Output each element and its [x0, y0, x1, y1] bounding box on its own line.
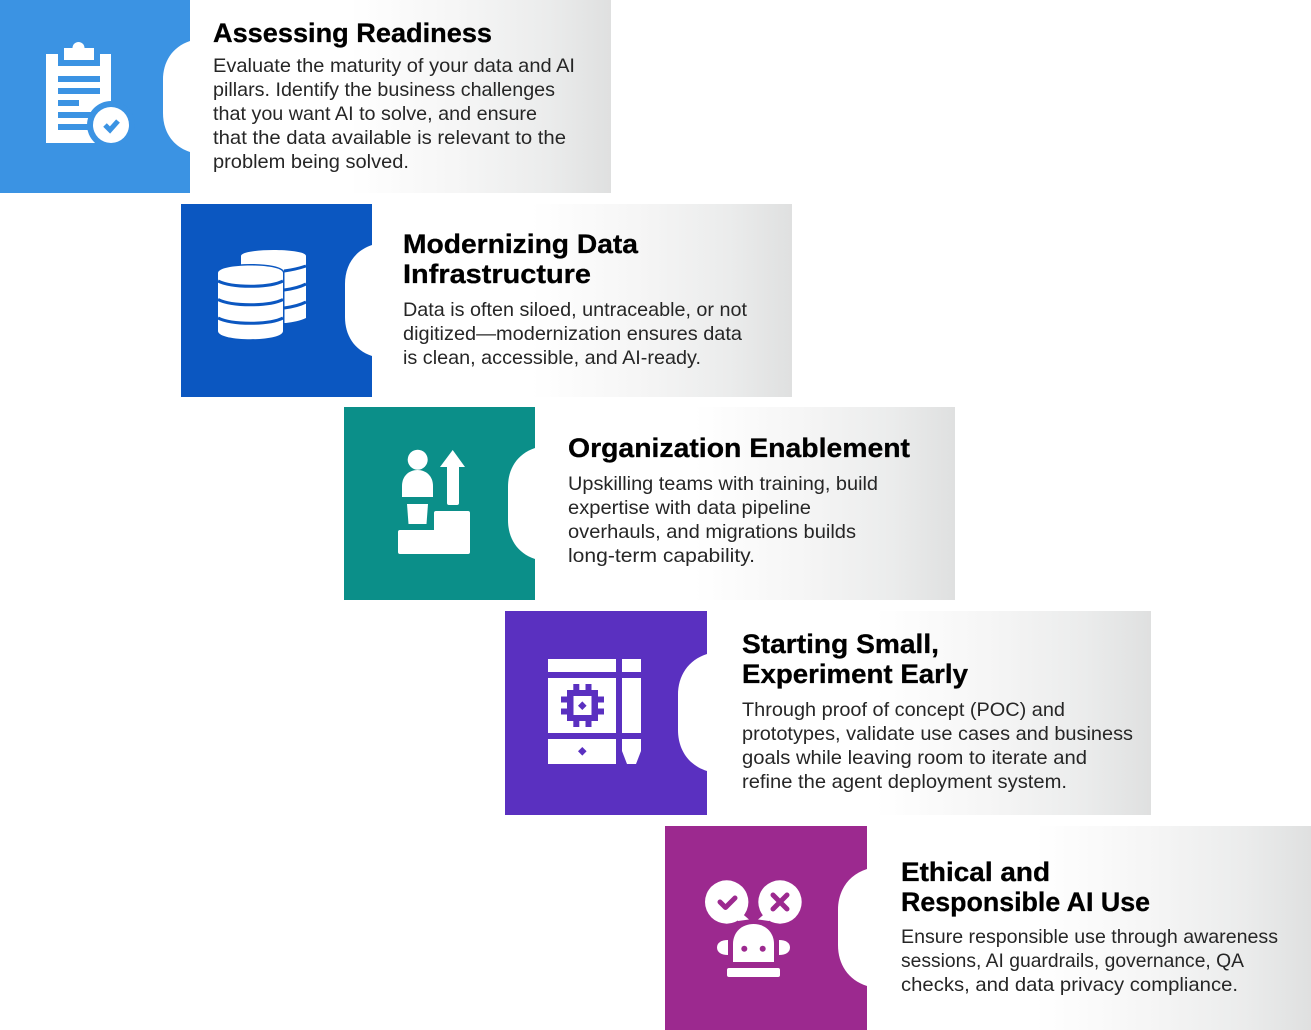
text block: sessions, AI guardrails, governance, QA [901, 950, 1244, 972]
panel: Organization Enablement [344, 407, 955, 600]
icon: robot with yes and no speech bubbles [705, 880, 802, 977]
text block: Upskilling teams with training, build [568, 473, 878, 495]
colored icon block [181, 204, 372, 397]
text block [901, 926, 1278, 996]
panel: Assessing Readiness [0, 0, 611, 193]
text block [213, 55, 575, 173]
text block: Ensure responsible use through awareness [901, 926, 1278, 948]
heading: Ethical and [901, 857, 1050, 887]
text block: expertise with data pipeline [568, 497, 811, 519]
text block: Data is often siloed, untraceable, or not [403, 299, 748, 321]
text block: refine the agent deployment system. [742, 771, 1067, 793]
text card background [707, 611, 1151, 815]
colored icon block [0, 0, 190, 193]
text block: prototypes, validate use cases and business [742, 723, 1133, 745]
text card background [190, 0, 611, 193]
heading [742, 629, 968, 689]
text block: problem being solved. [213, 151, 409, 173]
colored icon block [344, 407, 535, 600]
text block: checks, and data privacy compliance. [901, 974, 1238, 996]
panel: Starting Small, Experiment Early [505, 611, 1151, 815]
text block: is clean, accessible, and AI-ready. [403, 347, 701, 369]
heading: Experiment Early [742, 659, 968, 689]
icon: person climbing steps [398, 450, 470, 554]
text block: that the data available is relevant to the [213, 127, 566, 149]
text card background [867, 826, 1311, 1030]
icon: clipboard with check [46, 40, 141, 150]
text block: Evaluate the maturity of your data and AI [213, 55, 575, 77]
text block: that you want AI to solve, and ensure [213, 103, 537, 125]
icon: blueprint chip and pencil [548, 659, 641, 764]
heading: Assessing Readiness [213, 18, 492, 48]
heading: Responsible AI Use [901, 887, 1150, 917]
heading: Starting Small, [742, 629, 939, 659]
text block: overhauls, and migrations builds [568, 521, 856, 543]
text block [403, 299, 748, 369]
text block [568, 473, 878, 567]
panel: Ethical and Responsible AI Use [665, 826, 1311, 1030]
icon: database stacks [218, 250, 306, 339]
heading: Modernizing Data [403, 229, 639, 259]
colored icon block [505, 611, 707, 815]
text block [742, 699, 1133, 793]
heading [901, 857, 1150, 917]
text block: goals while leaving room to iterate and [742, 747, 1087, 769]
text block: long-term capability. [568, 545, 755, 567]
heading: Infrastructure [403, 259, 591, 289]
text block: digitized—modernization ensures data [403, 323, 742, 345]
text block: Through proof of concept (POC) and [742, 699, 1065, 721]
heading [403, 229, 639, 289]
text card background [372, 204, 792, 397]
text block: pillars. Identify the business challenges [213, 79, 555, 101]
panel: Modernizing Data Infrastructure [181, 204, 792, 397]
heading: Organization Enablement [568, 433, 910, 463]
colored icon block [665, 826, 867, 1030]
text card background [535, 407, 955, 600]
